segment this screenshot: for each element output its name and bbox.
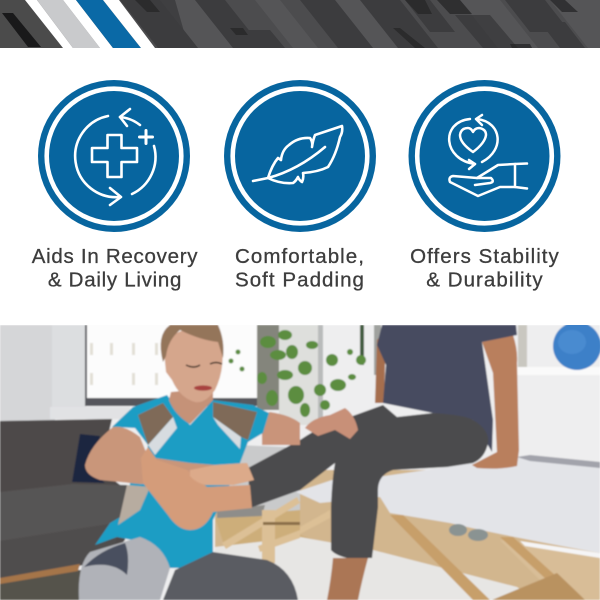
massage table with sheet and wooden legs (217, 445, 600, 600)
caption: durability: Offers Stability (410, 245, 560, 268)
icon: stability badge (408, 80, 560, 232)
patient seated on table (248, 325, 519, 600)
photo: therapist stretching a patient's leg (0, 322, 600, 600)
caption: durability: & Durability (426, 268, 544, 292)
blue exercise ball (553, 322, 600, 370)
floor and rug (0, 470, 600, 600)
potted plant leaves (228, 330, 366, 417)
caption: recovery: & Daily Living (48, 268, 182, 292)
room background with window and wall (0, 325, 600, 600)
icon: feather badge (224, 80, 376, 232)
sofa (0, 419, 127, 584)
caption: padding: Comfortable, (235, 245, 365, 268)
top banner (0, 0, 600, 48)
therapist supporting the patient's foot (79, 325, 358, 600)
caption: recovery: Aids In Recovery (32, 245, 198, 268)
caption: padding: Soft Padding (235, 268, 365, 292)
icon: recovery badge (38, 80, 190, 232)
